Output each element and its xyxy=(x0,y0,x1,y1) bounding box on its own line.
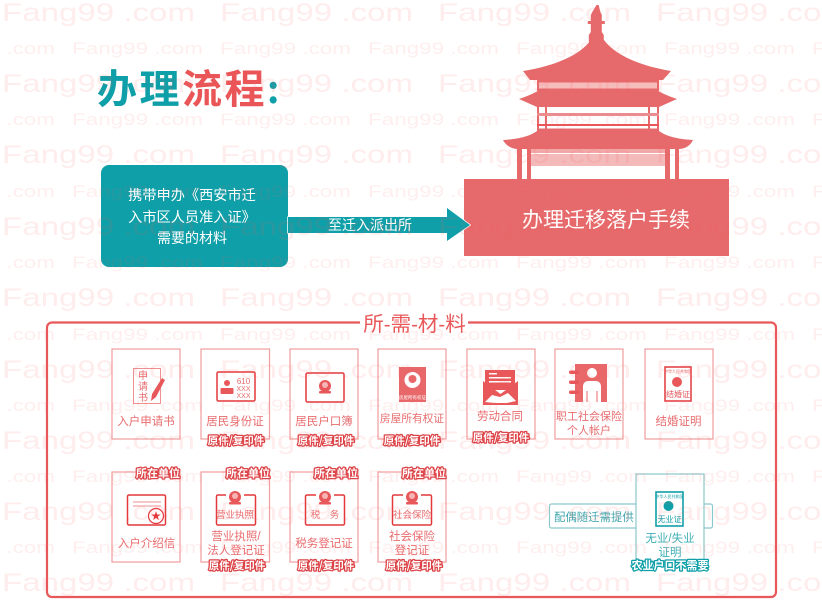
watermark: Fang99 .com xyxy=(368,325,499,344)
card: 劳动合同: 原件/复印件 xyxy=(473,430,530,445)
watermark: Fang99 .com xyxy=(2,284,195,312)
panel: migration procedures xyxy=(464,179,729,256)
card: 房屋所有权证 xyxy=(378,349,446,448)
watermark: Fang99 .com xyxy=(438,213,631,241)
watermark: Fang99 .com xyxy=(516,467,647,486)
card: 营业执照/法人登记证: 法人登记证 xyxy=(207,543,265,557)
card: 居民身份证 xyxy=(201,349,270,448)
card: 营业执照/法人登记证: 原件/复印件 xyxy=(209,558,266,573)
card: 居民户口簿: 居民户口簿 xyxy=(295,414,353,428)
watermark: Fang99 .com xyxy=(368,39,499,58)
card: 营业执照/法人登记证 xyxy=(201,465,270,573)
callout: 配偶随迁需提供: 配偶随迁需提供 xyxy=(554,510,634,524)
watermark: Fang99 .com xyxy=(72,110,203,129)
card: 入户申请书: 申 xyxy=(138,369,148,382)
card: 税务登记证: 原件/复印件 xyxy=(298,558,355,573)
watermark: Fang99 .com xyxy=(220,284,413,312)
card: 职工社会保险个人账户: 职工社会保险 xyxy=(556,409,622,423)
card: 入户申请书 xyxy=(112,349,180,439)
card: 居民身份证: 原件/复印件 xyxy=(208,433,265,448)
card: 无业/失业证明: 中华人民共和国 xyxy=(656,493,684,499)
watermark: Fang99 .com xyxy=(656,70,822,98)
card: 社会保险登记证: 所在单位 xyxy=(402,465,446,481)
card: 居民户口簿 xyxy=(290,349,358,448)
watermark: Fang99 .com xyxy=(220,569,413,597)
card: 税务登记证: 税务登记证 xyxy=(295,536,353,550)
watermark: Fang99 .com xyxy=(220,213,413,241)
watermark: Fang99 .com xyxy=(220,253,351,272)
card: 社会保险登记证: 社会保险 xyxy=(393,509,431,521)
card: 结婚证明 xyxy=(645,349,713,439)
watermark: Fang99 .com xyxy=(656,213,822,241)
watermark: Fang99 .com xyxy=(220,427,413,455)
watermark: Fang99 .com xyxy=(220,356,413,384)
watermark: Fang99 .com xyxy=(72,325,203,344)
card: 劳动合同 xyxy=(467,349,535,445)
card: 无业/失业证明: 无业证 xyxy=(658,514,682,524)
watermark: Fang99 .com xyxy=(72,39,203,58)
watermark: Fang99 .com xyxy=(656,356,822,384)
watermark: Fang99 .com xyxy=(72,467,203,486)
watermark: Fang99 .com xyxy=(368,538,499,557)
watermark: Fang99 .com xyxy=(516,110,647,129)
card: 社会保险登记证: 原件/复印件 xyxy=(386,558,443,573)
watermark: Fang99 .com xyxy=(72,182,203,201)
watermark: Fang99 .com xyxy=(2,141,195,169)
watermark: Fang99 .com xyxy=(656,284,822,312)
watermark: Fang99 .com xyxy=(516,396,647,415)
watermark: Fang99 .com xyxy=(2,569,195,597)
watermark: Fang99 .com xyxy=(438,70,631,98)
card: 税务登记证: 所在单位 xyxy=(314,465,358,481)
watermark: Fang99 .com xyxy=(368,396,499,415)
card: 职工社会保险个人账户: 个人帐户 xyxy=(567,423,611,437)
card: 结婚证明: 结婚证 xyxy=(666,389,690,399)
watermark: Fang99 .com xyxy=(438,569,631,597)
watermark: Fang99 .com xyxy=(368,253,499,272)
card: 居民身份证: XXX xyxy=(236,393,251,400)
watermark: Fang99 .com xyxy=(2,70,195,98)
watermark: Fang99 .com xyxy=(664,538,795,557)
card: 无业/失业证明: 农业户口不需要 xyxy=(632,557,708,573)
watermark: Fang99 .com xyxy=(72,253,203,272)
watermark: Fang99 .com xyxy=(72,538,203,557)
watermark: Fang99 .com xyxy=(220,467,351,486)
watermark: Fang99 .com xyxy=(438,427,631,455)
panel: materials to bring: 需要的材料 xyxy=(157,230,227,246)
watermark: Fang99 .com xyxy=(220,141,413,169)
card: 房屋所有权证: 原件/复印件 xyxy=(384,433,441,448)
watermark: Fang99 .com xyxy=(438,141,631,169)
card: 结婚证明: 结婚证明 xyxy=(656,414,702,428)
watermark: Fang99 .com xyxy=(220,110,351,129)
card: 无业/失业证明: 无业/失业 xyxy=(645,532,695,545)
watermark: Fang99 .com xyxy=(220,498,413,526)
card: 无业/失业证明: 证明 xyxy=(658,546,682,559)
card: 营业执照/法人登记证: 营业执照/ xyxy=(211,529,261,543)
card: 居民户口簿: 原件/复印件 xyxy=(298,433,355,448)
watermark: Fang99 .com xyxy=(664,253,795,272)
card: 社会保险登记证: 社会保险 xyxy=(389,529,435,543)
card: 劳动合同: 劳动合同 xyxy=(477,409,523,423)
watermark: Fang99 .com xyxy=(2,427,195,455)
panel: materials to bring: 入市区人员准入证》 xyxy=(128,209,256,226)
card: 社会保险登记证: 登记证 xyxy=(395,543,430,557)
watermark: Fang99 .com xyxy=(220,182,351,201)
watermark: Fang99 .com xyxy=(664,39,795,58)
card: 居民身份证: 居民身份证 xyxy=(206,414,264,428)
watermark: Fang99 .com xyxy=(664,182,795,201)
callout: 配偶随迁需提供 xyxy=(550,504,712,528)
card: 入户申请书: 入户申请书 xyxy=(117,414,175,428)
card: 房屋所有权证: 房屋所有权证 xyxy=(399,394,426,401)
watermark: Fang99 .com xyxy=(656,569,822,597)
card: 税务登记证 xyxy=(290,465,358,573)
watermark: Fang99 .com xyxy=(664,110,795,129)
watermark: Fang99 .com xyxy=(220,538,351,557)
card: 房屋所有权证: 房屋所有权证 xyxy=(380,412,444,425)
watermark: Fang99 .com xyxy=(220,39,351,58)
watermark: Fang99 .com xyxy=(2,498,195,526)
watermark: Fang99 .com xyxy=(368,467,499,486)
watermark: Fang99 .com xyxy=(438,356,631,384)
card: 营业执照/法人登记证: 所在单位 xyxy=(226,465,270,481)
panel: materials to bring xyxy=(101,165,288,267)
arrow: to police station: 至迁入派出所 xyxy=(328,217,412,233)
watermark: Fang99 .com xyxy=(2,356,195,384)
watermark: Fang99 .com xyxy=(516,39,647,58)
title: 办理流程: 办理流程: xyxy=(97,57,282,115)
card: 入户介绍信: 入户介绍信 xyxy=(118,536,175,550)
card: 居民身份证: 610 xyxy=(237,377,251,386)
card: 税务登记证: 税 务 xyxy=(311,509,340,521)
panel: materials to bring: 携带申办《西安市迁 xyxy=(128,187,256,204)
watermark: Fang99 .com xyxy=(220,396,351,415)
watermark: Fang99 .com xyxy=(368,110,499,129)
card: 入户申请书: 书 xyxy=(138,392,148,404)
card: 入户申请书: 请 xyxy=(138,380,148,393)
card: 入户介绍信: ★ xyxy=(151,512,161,522)
watermark: Fang99 .com xyxy=(72,396,203,415)
card: 入户介绍信: 所在单位 xyxy=(136,465,180,481)
watermark: Fang99 .com xyxy=(516,538,647,557)
card: 社会保险登记证 xyxy=(378,465,446,573)
pagoda illustration xyxy=(503,5,693,179)
watermark: Fang99 .com xyxy=(368,182,499,201)
watermark: Fang99 .com xyxy=(516,253,647,272)
card: 无业/失业证明 xyxy=(632,474,708,573)
card: 营业执照/法人登记证: 营业执照 xyxy=(216,509,254,521)
arrow: to police station xyxy=(288,208,470,241)
watermark: Fang99 .com xyxy=(516,325,647,344)
card: 居民身份证: XXX xyxy=(236,386,251,393)
watermark: Fang99 .com xyxy=(220,70,413,98)
card: 结婚证明: 中华人民共和国 xyxy=(664,368,692,374)
watermark: Fang99 .com xyxy=(516,182,647,201)
watermark: Fang99 .com xyxy=(220,325,351,344)
heading: 所-需-材-料: 所-需-材-料 xyxy=(363,313,466,336)
card: 职工社会保险个人账户 xyxy=(555,349,623,439)
watermark: Fang99 .com xyxy=(664,467,795,486)
watermark: Fang99 .com xyxy=(664,396,795,415)
watermark: Fang99 .com xyxy=(656,427,822,455)
watermark: Fang99 .com xyxy=(438,498,631,526)
watermark: Fang99 .com xyxy=(2,213,195,241)
watermark: Fang99 .com xyxy=(656,141,822,169)
watermark: Fang99 .com xyxy=(656,498,822,526)
card: 入户介绍信 xyxy=(112,465,180,562)
panel: migration procedures: 办理迁移落户手续 xyxy=(522,209,690,232)
watermark: Fang99 .com xyxy=(664,325,795,344)
watermark: Fang99 .com xyxy=(438,284,631,312)
